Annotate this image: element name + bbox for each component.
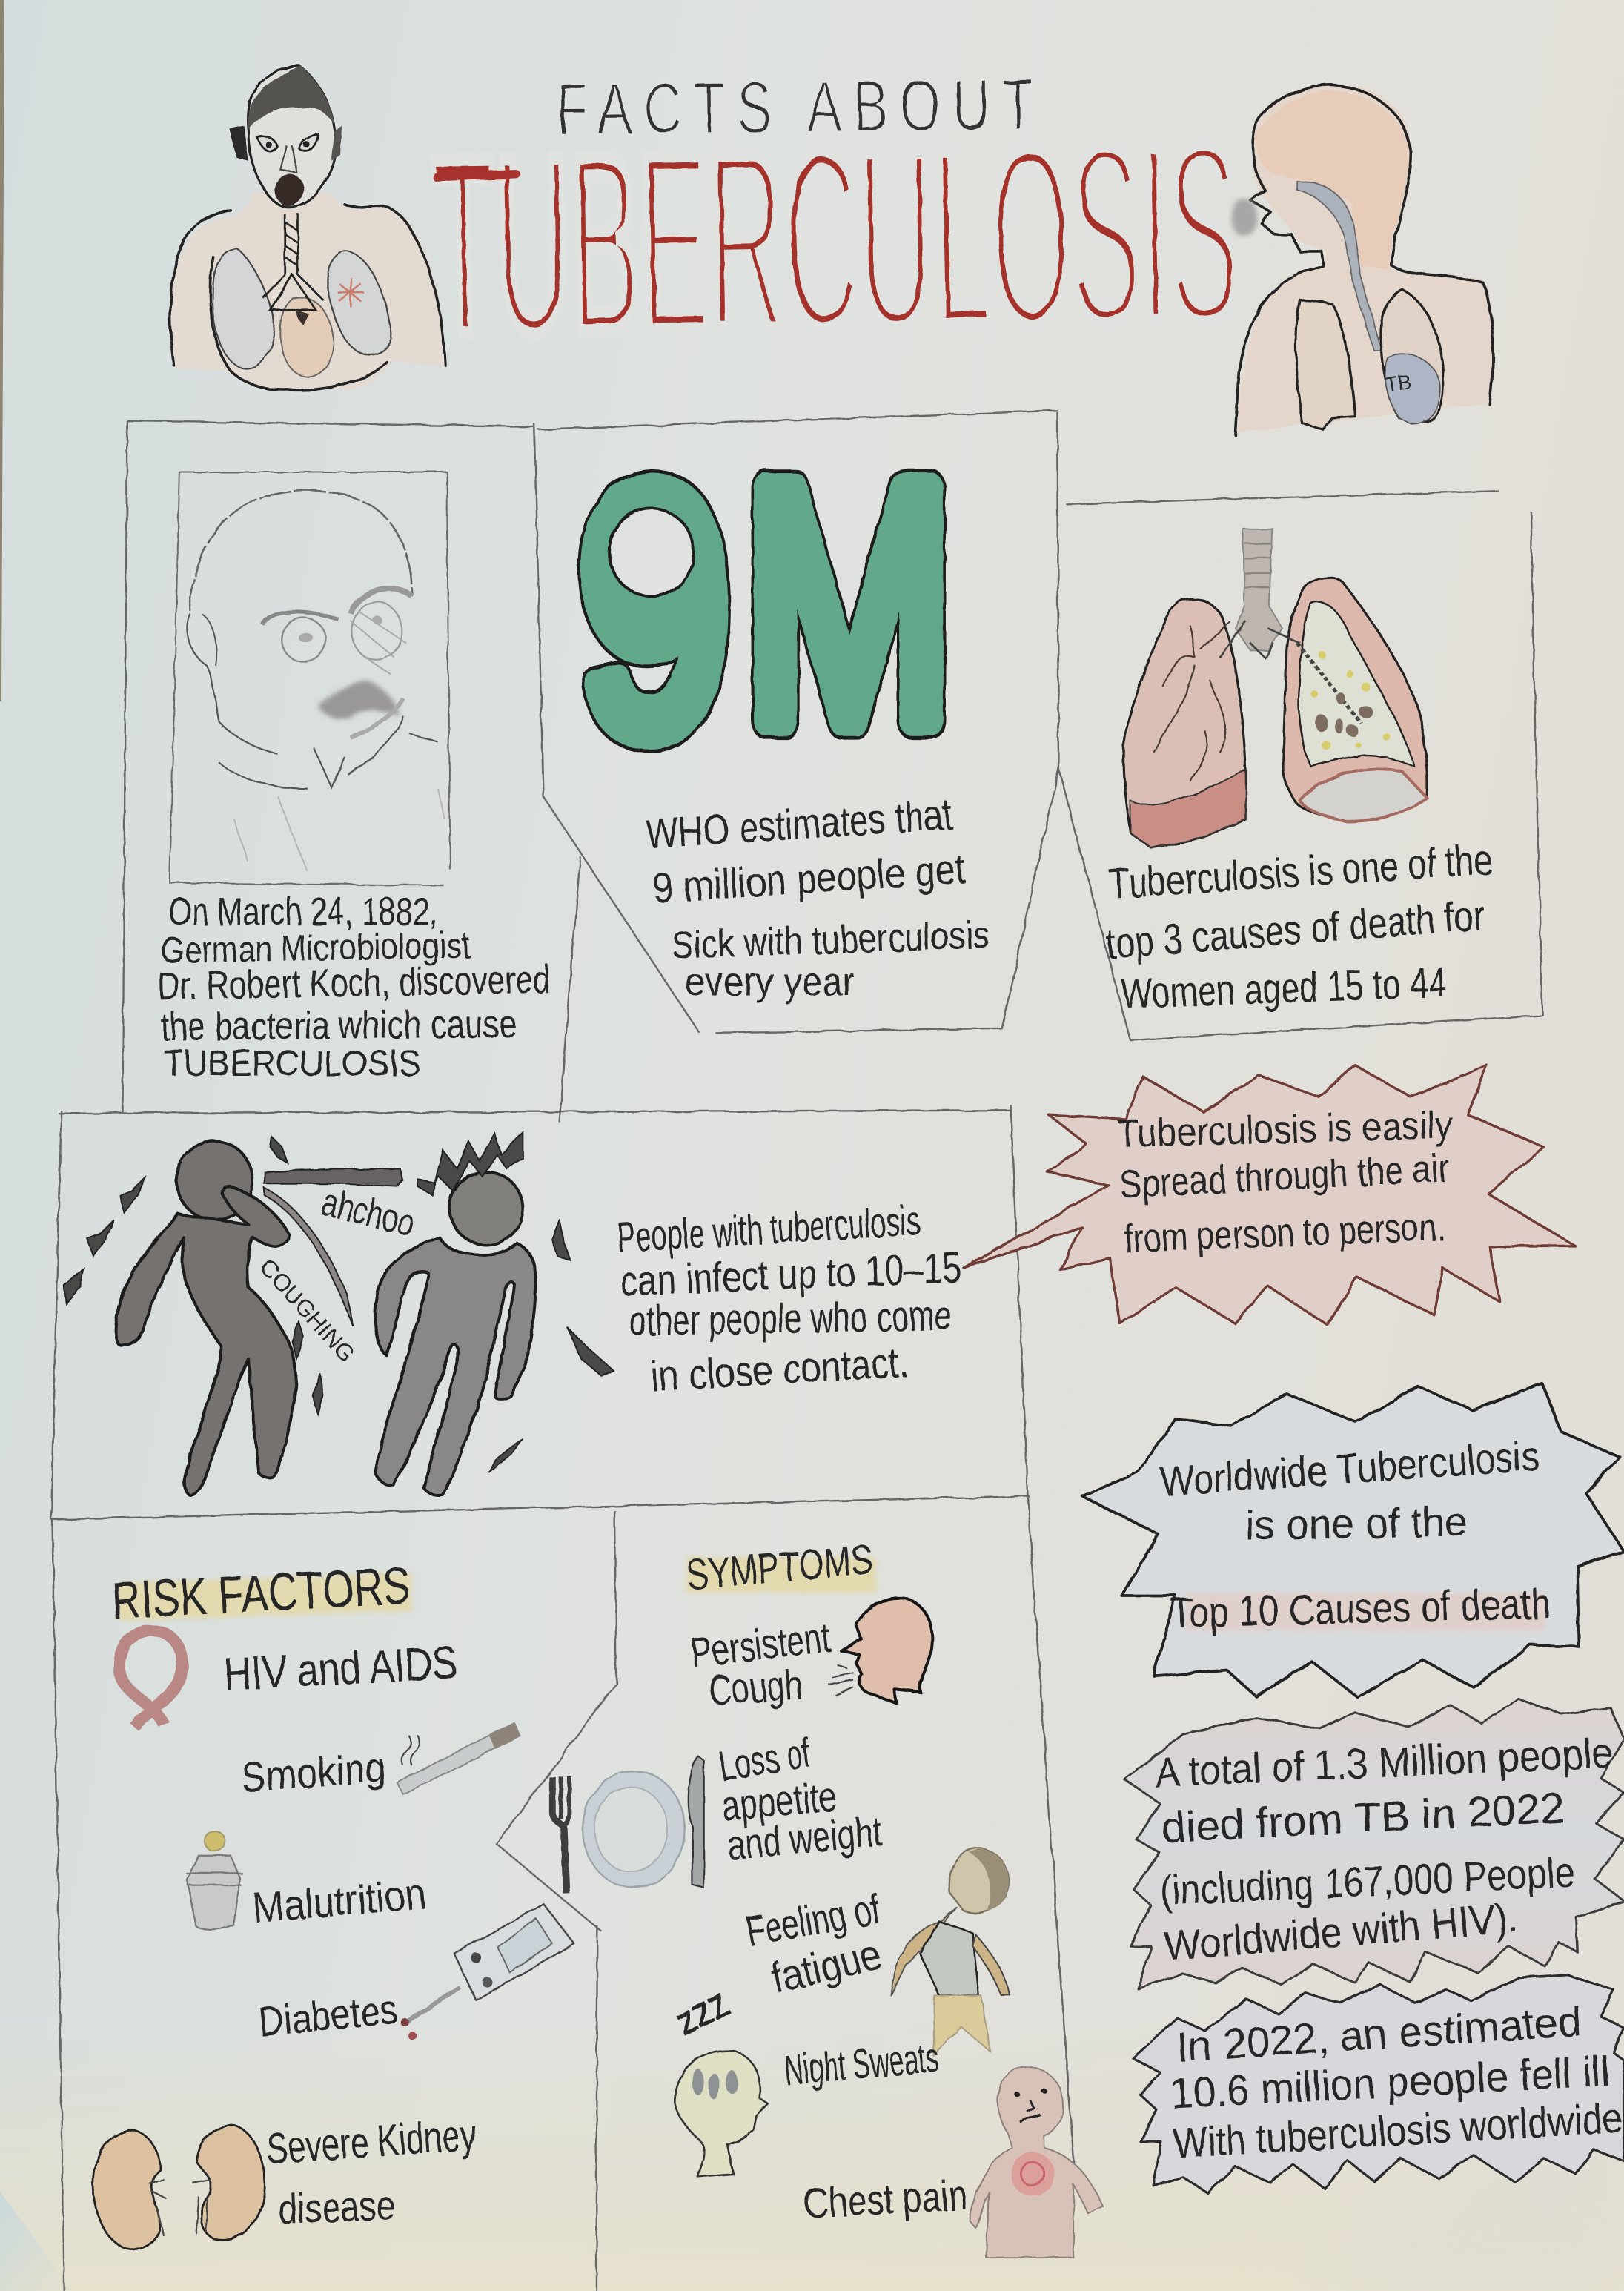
contagion text: can infect up to 10–15 [619, 1244, 963, 1306]
lungs caption text [1104, 836, 1494, 1018]
label: ahchoo: ahchoo [318, 1180, 419, 1246]
portrait of Dr. Robert Koch [170, 472, 450, 885]
icon: tired person [891, 1848, 1010, 2056]
icon: food bowl [185, 1831, 242, 1930]
severe kidney disease label [265, 2109, 478, 2233]
WHO estimate text: 9 million people get [652, 845, 967, 913]
callout: 1.3 million deaths: Worldwide with HIV). [1162, 1894, 1520, 1971]
loss of appetite label: and weight [725, 1808, 884, 1870]
illustration: diseased lungs [1124, 529, 1427, 847]
illustration: coughing person [116, 1141, 296, 1495]
big number 9M: 9 [580, 417, 729, 804]
heading: tuberculosis [430, 91, 1241, 386]
callout: top 10 causes of death: Worldwide Tuberculosis [1159, 1432, 1540, 1506]
Koch caption text: German Microbiologist [160, 925, 471, 971]
lungs caption text: top 3 causes of death for [1104, 892, 1486, 968]
lungs caption text: Tuberculosis is one of the [1107, 836, 1494, 908]
WHO estimate text: Sick with tuberculosis [671, 913, 990, 968]
panel: 9M statistic [580, 416, 990, 1004]
callout: spread through the air: Tuberculosis is easily [1116, 1103, 1454, 1156]
contagion text: other people who come [629, 1292, 952, 1345]
feeling of fatigue label [743, 1885, 886, 2003]
night sweats label: Night Sweats [783, 2034, 941, 2095]
Koch caption text: TUBERCULOSIS [164, 1042, 420, 1083]
illustration: droplets and cough spray [64, 1132, 614, 1472]
panel: coughing transmission [64, 1132, 963, 1495]
smoking label: Smoking [239, 1744, 388, 1802]
Koch caption text: Dr. Robert Koch, discovered [157, 958, 551, 1008]
chest pain label: Chest pain [803, 2172, 969, 2227]
label: coughing: COUGHING [255, 1254, 360, 1367]
loss of appetite label: Loss of [715, 1729, 814, 1791]
feeling of fatigue label: fatigue [767, 1931, 886, 2003]
heading: symptoms: SYMPTOMS [685, 1536, 875, 1599]
persistent cough label: Persistent [688, 1613, 832, 1676]
icon: glucose meter [400, 1904, 574, 2040]
HIV and AIDS label: HIV and AIDS [222, 1637, 459, 1701]
diabetes label: Diabetes. [256, 1985, 409, 2046]
loss of appetite label: appetite [720, 1773, 839, 1830]
contagion text: People with tuberculosis [616, 1197, 921, 1262]
contagion text: in close contact. [649, 1339, 910, 1401]
icon: zzz: ZZZ [672, 1987, 735, 2043]
loss of appetite label [715, 1729, 884, 1870]
heading: risk factors: RISK FACTORS [110, 1556, 412, 1630]
big number 9M: 9 [580, 417, 729, 804]
illustration: head profile with airway and TB lung, right of the title [1231, 85, 1493, 435]
callout: 1.3 million deaths: died from TB in 2022 [1161, 1785, 1565, 1852]
lungs caption text: Women aged 15 to 44 [1120, 959, 1448, 1018]
severe kidney disease label: disease [278, 2182, 396, 2233]
icon: sweating sleeping head [675, 2051, 768, 2177]
big number 9M: M [745, 416, 952, 793]
panel: symptoms [552, 1536, 1103, 2258]
Koch caption text: the bacteria which cause [160, 1002, 517, 1049]
icon: awareness ribbon [119, 1630, 182, 1727]
big number 9M: M [745, 416, 952, 793]
contagion text [616, 1197, 963, 1401]
callout: spread through the air [964, 1065, 1576, 1325]
icon: kidneys [93, 2124, 265, 2250]
callout: 10.6 million ill [1133, 1975, 1624, 2193]
icon: coughing head [829, 1598, 932, 1704]
illustration: listening person [375, 1171, 536, 1495]
malnutrition label: Malutrition [251, 1871, 428, 1932]
panel: Robert Koch [157, 472, 551, 1083]
illustration: head profile with airway and TB lung, right of the title: TB [1383, 369, 1413, 396]
WHO estimate text: every year [685, 960, 855, 1004]
severe kidney disease label: Severe Kidney [265, 2109, 478, 2174]
icon: plate, fork and knife [552, 1756, 704, 1894]
panel frames [51, 411, 1542, 2291]
callout: 10.6 million ill: In 2022, an estimated [1175, 1997, 1583, 2072]
feeling of fatigue label: Feeling of [743, 1885, 884, 1956]
callout: spread through the air: Spread through the air [1118, 1146, 1451, 1207]
callout: top 10 causes of death: is one of the [1245, 1498, 1468, 1550]
big number 9M [580, 416, 952, 804]
callout: spread through the air: from person to person. [1123, 1205, 1446, 1261]
Koch caption text: On March 24, 1882, [168, 890, 438, 933]
WHO estimate text: WHO estimates that [644, 791, 954, 859]
illustration: torso with lungs, left of the title [170, 65, 445, 391]
callout: 1.3 million deaths [1124, 1699, 1624, 1988]
WHO estimate text [644, 791, 990, 1004]
Koch caption text [157, 890, 551, 1083]
icon: cigarette [397, 1722, 520, 1794]
panel: risk factors [93, 1556, 574, 2250]
callout: 10.6 million ill: 10.6 million people fell ill [1170, 2048, 1611, 2118]
icon: person with chest pain [970, 2066, 1103, 2258]
persistent cough label [688, 1613, 832, 1715]
callout: top 10 causes of death: Top 10 Causes of death [1170, 1580, 1551, 1637]
panel: lungs and women's mortality [1104, 529, 1494, 1018]
callout: top 10 causes of death [1082, 1383, 1624, 1698]
heading: facts about: FACTS ABOUT [556, 64, 1046, 151]
persistent cough label: Cough [707, 1661, 803, 1715]
